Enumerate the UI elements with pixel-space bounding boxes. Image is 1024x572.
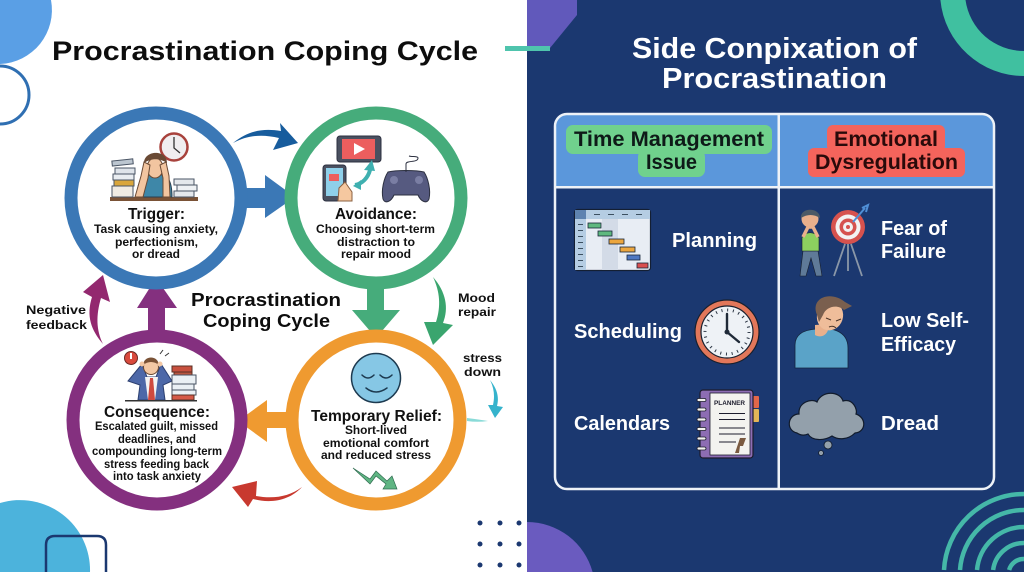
text: stress down label: stress xyxy=(463,351,502,365)
text: avoidance: Choosing short-term xyxy=(316,224,435,236)
text: stress down label: down xyxy=(464,365,501,379)
arrow: curved negative feedback xyxy=(83,275,110,344)
text: mood repair label: Mood xyxy=(458,291,495,305)
text: consequence: Consequence: xyxy=(104,404,210,421)
icon: dread cloud xyxy=(789,393,864,456)
icon: stressed person at desk xyxy=(110,134,198,201)
arrow: avoidance to relief xyxy=(352,286,400,338)
header: emotional dysregulation xyxy=(808,125,965,177)
text: consequence: compounding long-term xyxy=(92,446,222,458)
text: trigger: Task causing anxiety, xyxy=(94,224,218,236)
circle: trigger ring xyxy=(71,113,241,283)
heading: side comparison title: Procrastination xyxy=(662,63,887,95)
arrow: curved dark blue xyxy=(233,123,298,150)
arrow: relief to consequence xyxy=(238,400,288,442)
arrow: consequence to trigger xyxy=(137,278,177,333)
text: mood repair label xyxy=(458,291,496,319)
text: centre label: Coping Cycle xyxy=(203,311,330,331)
arrow: curved mood repair xyxy=(424,277,453,345)
header: time management issue: Issue xyxy=(646,151,697,174)
text: centre label xyxy=(191,290,341,331)
text: trigger xyxy=(94,206,218,261)
arrow: trigger to avoidance xyxy=(245,175,295,218)
label: dread: Dread xyxy=(881,413,939,435)
label: fear of failure: Failure xyxy=(881,241,946,263)
text: negative feedback label: feedback xyxy=(26,318,87,332)
label: low self-efficacy xyxy=(881,310,969,356)
text: consequence: deadlines, and xyxy=(118,434,196,446)
header: time management issue xyxy=(566,125,772,177)
label: scheduling: Scheduling xyxy=(574,321,682,343)
icon: screens and game controller xyxy=(323,136,430,202)
icon: anxious person and target xyxy=(800,205,868,276)
label: low self-efficacy: Low Self- xyxy=(881,310,969,332)
title: Procrastination Coping Cycle: Procrastination Coping Cycle xyxy=(52,36,478,66)
icon: sad person xyxy=(795,296,852,368)
arrow: stress down xyxy=(467,380,503,422)
heading: side comparison title: Side Conpixation of xyxy=(632,33,917,65)
text: trigger: or dread xyxy=(132,249,180,261)
text: negative feedback label xyxy=(26,303,87,332)
text: consequence: into task anxiety xyxy=(113,471,202,483)
icon: planner notebook: PLANNER xyxy=(714,400,745,407)
text: trigger: Trigger: xyxy=(128,206,185,223)
text: temporary relief: Temporary Relief: xyxy=(311,408,442,425)
text: mood repair label: repair xyxy=(458,305,496,319)
heading: side comparison title xyxy=(632,33,917,95)
text: temporary relief xyxy=(311,408,442,462)
circle: avoidance ring xyxy=(291,113,461,283)
text: consequence xyxy=(92,404,222,483)
text: temporary relief: emotional comfort xyxy=(323,438,429,450)
text: negative feedback label: Negative xyxy=(26,303,86,317)
text: temporary relief: Short-lived xyxy=(345,425,407,437)
label: planning: Planning xyxy=(672,230,757,252)
header: emotional dysregulation: Dysregulation xyxy=(815,151,958,174)
arrow: curved red xyxy=(232,481,302,507)
text: consequence: stress feeding back xyxy=(104,459,210,471)
text: consequence: Escalated guilt, missed xyxy=(95,421,218,433)
icon: calm face xyxy=(352,354,400,402)
header: emotional dysregulation: Emotional xyxy=(834,128,938,151)
text: avoidance: distraction to xyxy=(337,237,415,249)
icon: downward zigzag arrow xyxy=(353,468,397,489)
panel: coping cycle diagram xyxy=(26,113,503,507)
text: temporary relief: and reduced stress xyxy=(321,450,431,462)
header: time management issue: Time Management xyxy=(574,128,764,151)
icon: gantt chart xyxy=(574,210,650,270)
icon: stressed person with books xyxy=(124,350,197,402)
circle: relief ring xyxy=(292,336,460,504)
text: avoidance: Avoidance: xyxy=(335,206,417,223)
icon: planner notebook xyxy=(697,390,759,458)
text: stress down label xyxy=(463,351,502,379)
label: calendars: Calendars xyxy=(574,413,670,435)
text: centre label: Procrastination xyxy=(191,290,341,310)
label: fear of failure: Fear of xyxy=(881,218,947,240)
circle: consequence ring xyxy=(73,336,241,504)
panel: comparison table xyxy=(555,114,994,489)
label: low self-efficacy: Efficacy xyxy=(881,334,957,356)
icon: clock xyxy=(695,300,759,364)
text: avoidance xyxy=(316,206,435,261)
label: fear of failure xyxy=(881,218,947,263)
text: avoidance: repair mood xyxy=(341,249,411,261)
text: trigger: perfectionism, xyxy=(115,237,198,249)
